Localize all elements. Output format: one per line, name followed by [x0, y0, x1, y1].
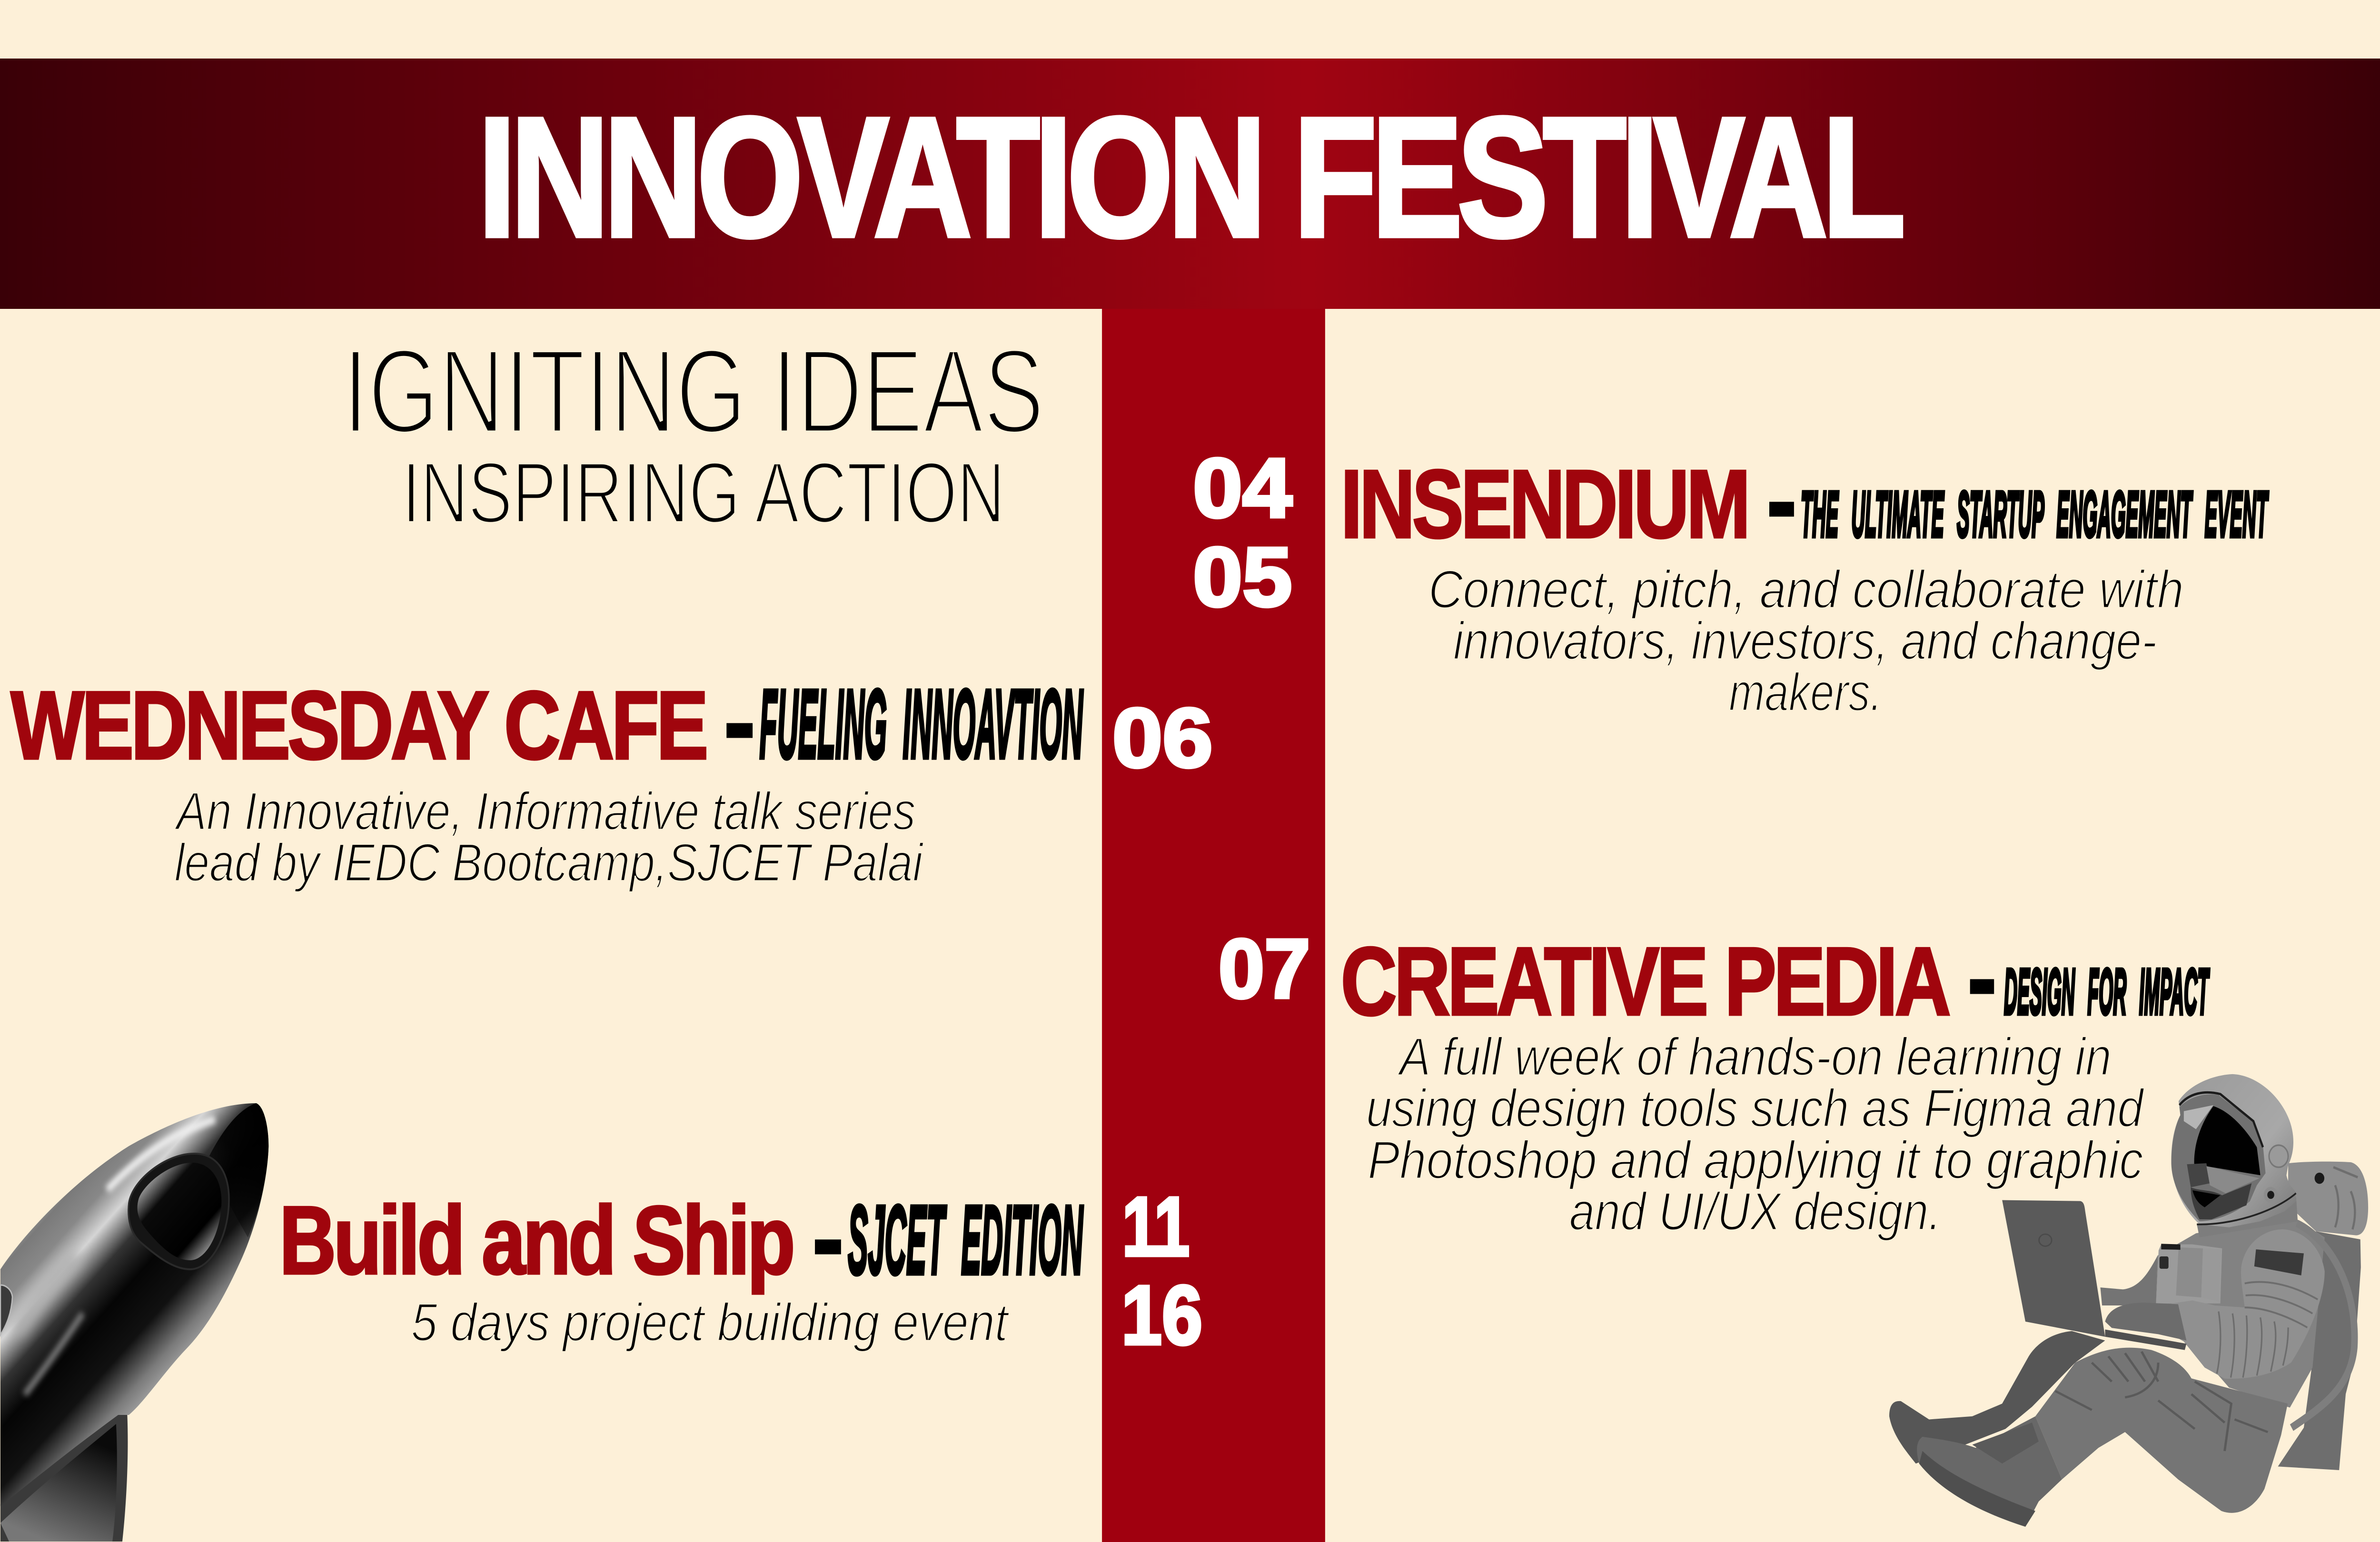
laptop and glove: [2002, 1200, 2186, 1350]
laptop: [2002, 1200, 2186, 1350]
near leg: [1917, 1348, 2288, 1527]
rocket body: [0, 1103, 268, 1506]
panel: Insendium: [1341, 442, 2269, 722]
dash: -: [724, 663, 755, 780]
heading: INSENDIUM: [1341, 450, 1748, 558]
glove: [2105, 1303, 2186, 1341]
upper body: [2100, 1074, 2325, 1379]
panel: Creative Pedia: [1341, 919, 2210, 1242]
description: using design tools such as Figma and: [1366, 1079, 2145, 1138]
date 05: 05: [1193, 530, 1292, 623]
dash: -: [813, 1179, 844, 1296]
description: A full week of hands-on learning in: [1397, 1028, 2112, 1087]
rocket fin: [0, 1414, 128, 1542]
rear forearm: [2100, 1255, 2158, 1305]
panel: Wednesday Cafe: [11, 663, 1083, 893]
title: INNOVATION FESTIVAL: [478, 82, 1903, 273]
far leg: [1889, 1331, 2105, 1463]
flag patch: [2254, 1249, 2304, 1275]
rocket highlights: [108, 1119, 215, 1190]
description: innovators, investors, and change-: [1453, 612, 2157, 671]
date 04: 04: [1193, 441, 1292, 534]
tagline line 2: INSPIRING ACTION: [402, 445, 1005, 542]
icon: rocket: [0, 1103, 268, 1542]
rocket window: [129, 1154, 229, 1269]
near boot: [1917, 1416, 2062, 1527]
panel: Build and Ship: [279, 1179, 1083, 1353]
tagline: [343, 325, 1044, 542]
icon: astronaut with laptop: [1889, 1074, 2368, 1527]
dash: -: [1767, 442, 1796, 559]
rear porthole: [0, 1285, 12, 1335]
description: lead by IEDC Bootcamp,SJCET Palai: [174, 833, 924, 893]
timeline dates: [1112, 441, 1310, 1362]
title banner: [0, 59, 2380, 309]
heading: CREATIVE PEDIA: [1341, 928, 1949, 1036]
date 16: 16: [1121, 1268, 1202, 1362]
near arm: [2170, 1229, 2325, 1379]
date 07: 07: [1219, 922, 1310, 1015]
description: An Innovative, Informative talk series: [174, 782, 916, 841]
dash: -: [1968, 919, 1996, 1036]
subtitle: SJCET EDITION: [848, 1185, 1083, 1295]
description: [1366, 1028, 2145, 1242]
description: [1428, 560, 2184, 722]
description: and UI/UX design.: [1569, 1182, 1941, 1242]
date 11: 11: [1122, 1180, 1190, 1273]
description: Connect, pitch, and collaborate with: [1428, 560, 2184, 620]
subtitle: DESIGN FOR IMPACT: [2004, 956, 2210, 1028]
heading: Build and Ship: [279, 1186, 793, 1295]
tagline line 1: IGNITING IDEAS: [343, 325, 1044, 458]
description: [174, 782, 924, 893]
centre timeline bar: [1102, 305, 1325, 1542]
heading: WEDNESDAY CAFE: [11, 672, 706, 780]
description: Photoshop and applying it to graphic: [1368, 1131, 2143, 1190]
subtitle: THE ULTIMATE STARTUP ENGAGEMENT EVENT: [1801, 478, 2269, 550]
description: makers.: [1729, 663, 1882, 722]
visor: [2172, 1094, 2266, 1221]
description: 5 days project building event: [411, 1293, 1010, 1353]
date 06: 06: [1112, 691, 1213, 784]
chest pack: [2156, 1244, 2222, 1304]
backpack and torso: [2156, 1162, 2368, 1470]
subtitle: FUELING INNOAVTION: [759, 669, 1083, 779]
helmet: [2171, 1074, 2298, 1237]
